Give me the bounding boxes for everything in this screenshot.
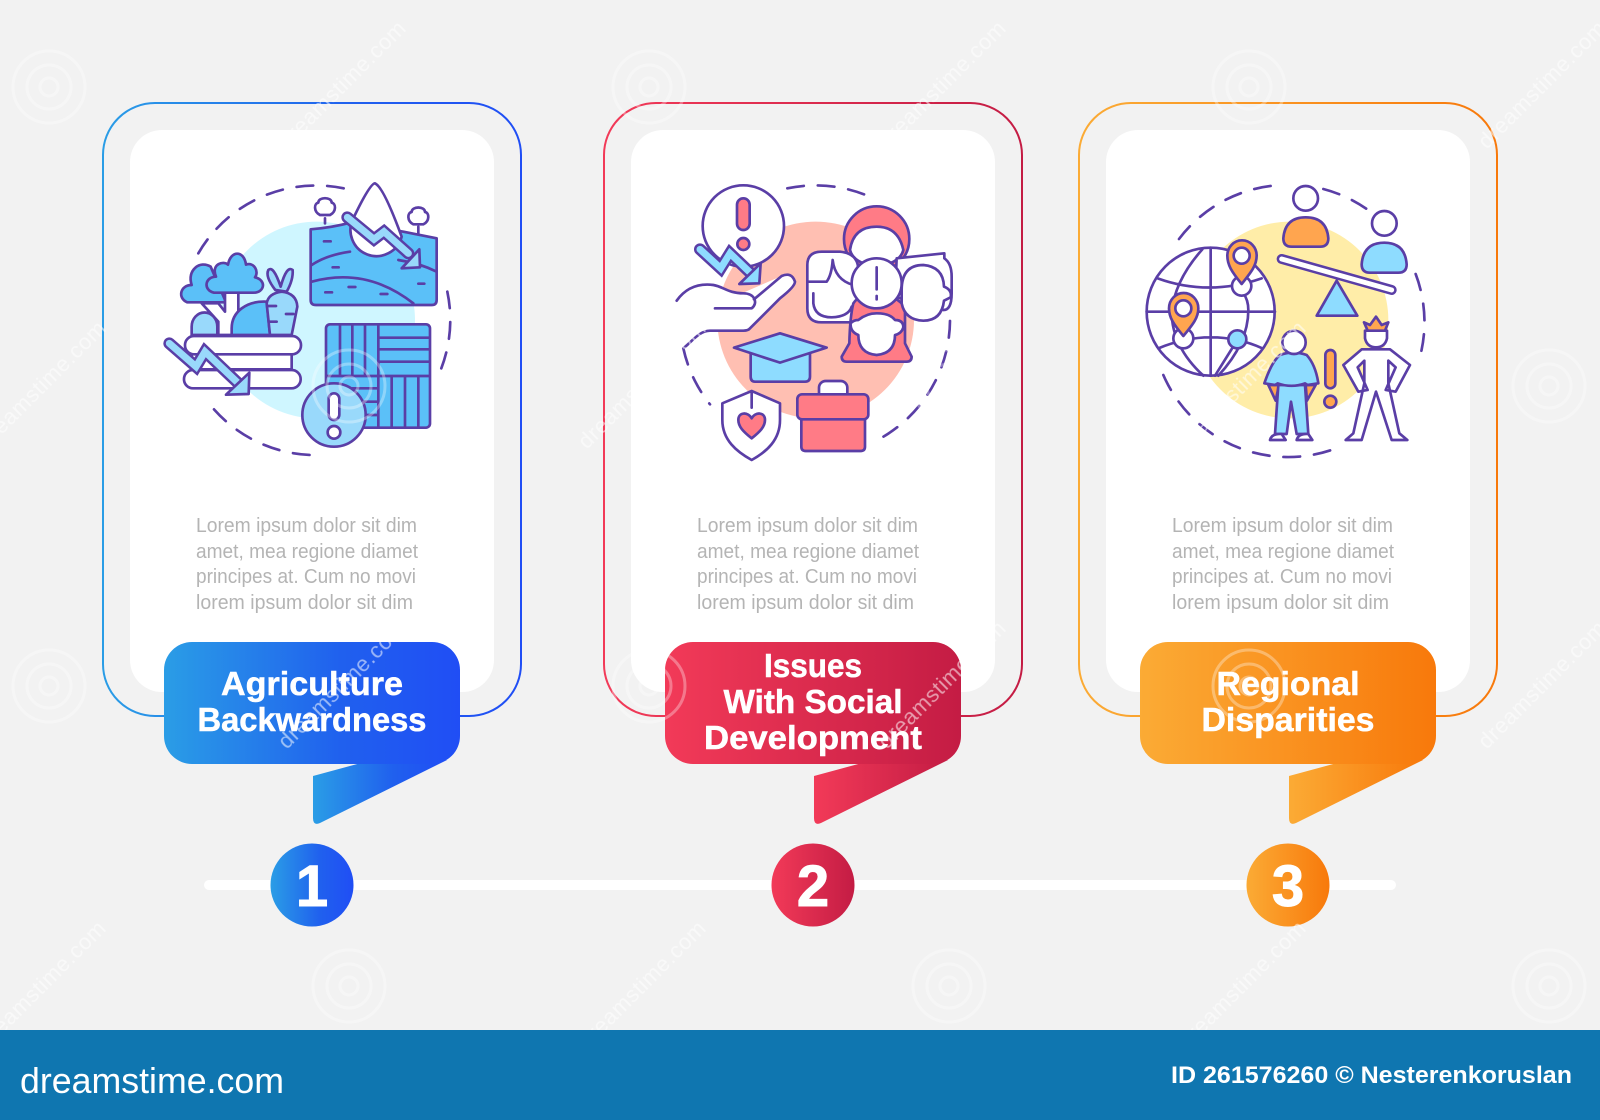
panel: social development (604, 103, 1022, 926)
panel outline (604, 103, 1022, 716)
body text: lorem ipsum dolor sit dim (196, 592, 413, 614)
footer credit: ID 261576260 © Nesterenkoruslan (1171, 1062, 1572, 1089)
number badge 3: 3 (1272, 854, 1304, 919)
body text: amet, mea regione diamet (1172, 541, 1394, 563)
icon: social issues (677, 185, 952, 460)
callout tail (814, 760, 948, 824)
number badge 2 (772, 844, 854, 926)
watermark text: dreamstime.com (1173, 916, 1311, 1054)
body text (196, 515, 418, 614)
body text: Lorem ipsum dolor sit dim (196, 515, 417, 537)
callout tail (313, 760, 447, 824)
heading label: Disparities (1202, 701, 1374, 738)
panel inner card (130, 130, 494, 692)
panel inner card (1106, 130, 1470, 692)
panel outline (1079, 103, 1497, 716)
body text: Lorem ipsum dolor sit dim (1172, 515, 1393, 537)
heading label: Issues (764, 647, 862, 684)
watermark text: dreamstime.com (873, 16, 1011, 154)
body text: lorem ipsum dolor sit dim (1172, 592, 1389, 614)
watermark text: dreamstime.com (573, 316, 711, 454)
number badge 1: 1 (296, 854, 328, 919)
watermark text: dreamstime.com (1173, 316, 1311, 454)
body text: Lorem ipsum dolor sit dim (697, 515, 918, 537)
heading label: Agriculture (221, 665, 403, 702)
heading label: Backwardness (198, 701, 426, 738)
watermark text: dreamstime.com (573, 916, 711, 1054)
watermark text: dreamstime.com (273, 616, 411, 754)
footer logo: dreamstime.com (20, 1060, 284, 1101)
callout tail (1289, 760, 1423, 824)
panel inner card (631, 130, 995, 692)
heading label: Regional (1216, 665, 1360, 702)
panel: agriculture backwardness (103, 103, 521, 926)
icon: agriculture (169, 183, 450, 455)
watermark text: dreamstime.com (873, 616, 1011, 754)
icon: regional disparities (1147, 186, 1424, 457)
panel: regional disparities (1079, 103, 1497, 926)
body text (697, 515, 919, 614)
body text: amet, mea regione diamet (196, 541, 418, 563)
number badge 1 (270, 844, 354, 926)
number badge 3 (1246, 844, 1330, 926)
heading label (1140, 642, 1436, 764)
timeline line (204, 880, 1396, 890)
heading label: With Social (724, 683, 902, 720)
body text (1172, 515, 1394, 614)
body text: principes at. Cum no movi (697, 566, 917, 588)
body text: principes at. Cum no movi (1172, 566, 1392, 588)
heading label (665, 642, 961, 764)
panel outline (103, 103, 521, 716)
number badge 2: 2 (797, 854, 829, 919)
body text: amet, mea regione diamet (697, 541, 919, 563)
heading label (164, 642, 460, 764)
watermark text: dreamstime.com (273, 16, 411, 154)
heading label: Development (704, 719, 922, 756)
body text: principes at. Cum no movi (196, 566, 416, 588)
footer banner (0, 1030, 1600, 1120)
body text: lorem ipsum dolor sit dim (697, 592, 914, 614)
